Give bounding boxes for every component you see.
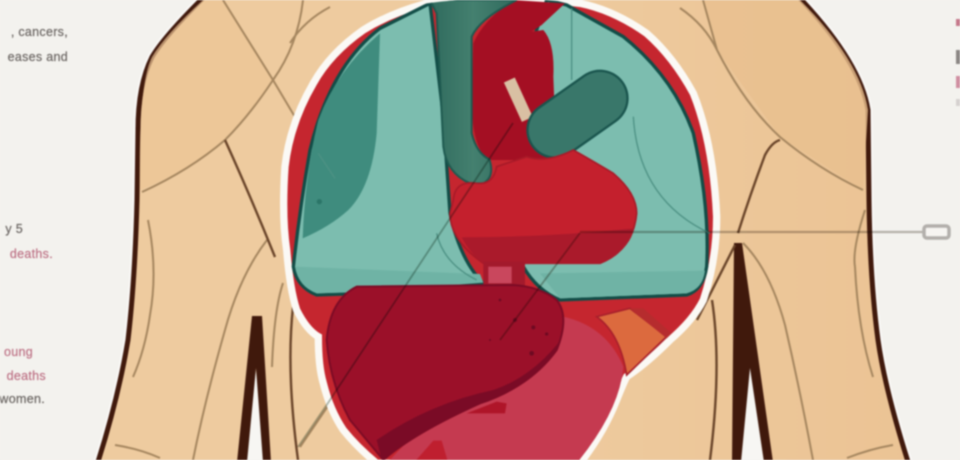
- text block: right column: [956, 19, 960, 106]
- right lung lower band: [540, 271, 705, 298]
- left text: about 1 in 5: y 5: [5, 222, 23, 236]
- left lung shaded lobe: [303, 33, 380, 238]
- left arm gap apex: [237, 316, 271, 460]
- spleen orange: [597, 308, 667, 375]
- heart stem: [483, 262, 525, 287]
- right text marker: [956, 19, 960, 26]
- left text: among: oung: [4, 345, 33, 359]
- left text: deaths pink: deaths: [7, 369, 46, 383]
- small vessel under liver: [467, 402, 507, 413]
- pulmonary artery fill: [555, 98, 600, 130]
- liver lower shade: [376, 344, 558, 458]
- horizontal leader: [580, 231, 924, 233]
- organs clipped to cavity: [293, 0, 710, 460]
- left text: diseases and: eases and: [8, 50, 68, 64]
- right text line: [956, 50, 960, 64]
- stomach: [387, 317, 623, 460]
- diagonal leader to liver: [500, 233, 580, 340]
- spleen shadow: [630, 308, 672, 338]
- right arm gap apex: [732, 243, 773, 460]
- left text: deaths: deaths.: [10, 247, 53, 261]
- shoulder tone right: [703, 0, 868, 190]
- trachea vessel: [430, 0, 517, 183]
- aorta: [472, 0, 565, 160]
- liver spots: [489, 299, 548, 356]
- shoulder tone left: [140, 0, 273, 190]
- left lung lower band: [295, 267, 483, 293]
- left text: women: women.: [0, 392, 45, 406]
- heart lower shade: [462, 228, 634, 263]
- text block: left column: [0, 25, 68, 406]
- left text: cancers: , cancers,: [11, 25, 68, 39]
- right lung: [513, 0, 707, 300]
- cigarette marker: [509, 80, 527, 119]
- pulmonary artery: [555, 98, 600, 130]
- left arm gap: [243, 365, 268, 460]
- leader lines: [298, 123, 924, 447]
- left lung: [293, 3, 483, 295]
- liver body: [327, 285, 563, 460]
- lung curve lines: [318, 8, 710, 280]
- diagonal leader to heart: [298, 123, 513, 447]
- leader end box: [924, 226, 949, 238]
- heart: [450, 150, 637, 263]
- right arm gap: [740, 365, 764, 460]
- muscle lines, dark: [225, 140, 780, 460]
- right text pale line: [956, 99, 960, 106]
- organs cavity: [284, 0, 717, 460]
- stem highlight: [488, 267, 512, 283]
- right text pink line: [956, 76, 960, 88]
- lung spot: [317, 199, 322, 204]
- white cavity outline: [284, 0, 717, 460]
- bottom red organ: [413, 441, 448, 460]
- liver: [327, 285, 567, 460]
